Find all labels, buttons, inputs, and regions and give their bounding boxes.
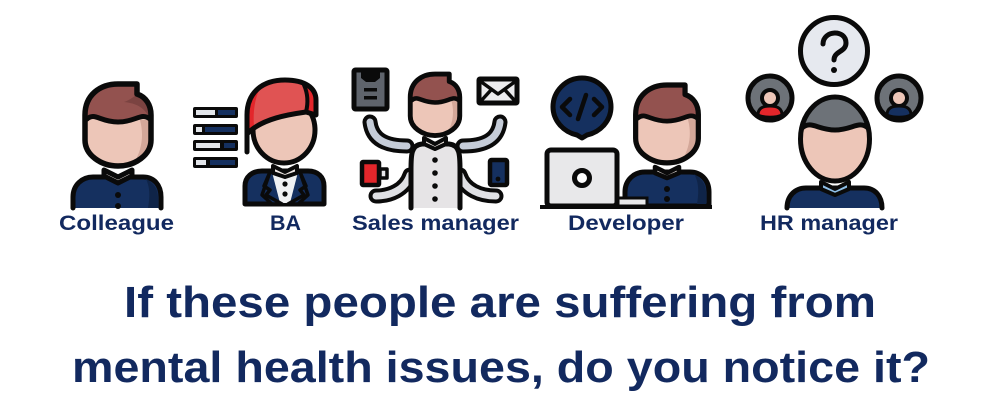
icon: code bubble [553,78,611,138]
icon: sales manager head [410,74,460,136]
figure: BA [245,80,324,204]
icon: developer body [625,167,709,206]
icon: left avatar [748,76,792,120]
figure: sales manager [354,70,517,208]
label: Colleague: Colleague [59,212,174,235]
icon: HR head [800,97,870,181]
icon: upper arms [370,122,500,146]
label: Developer: Developer [568,212,684,235]
title [72,278,930,392]
icon: question bubble [800,18,868,84]
figure: developer [540,78,712,209]
figure: colleague [73,84,161,209]
label: BA: BA [270,212,301,235]
icon: laptop [540,150,712,209]
icon: mug [362,162,387,185]
icon: colleague head [85,84,151,166]
icon: colleague body [73,170,161,209]
icon: BA head [247,80,316,163]
icon: clipboard [354,70,387,109]
label: Sales manager: Sales manager [352,212,519,235]
label: HR manager: HR manager [760,212,898,235]
icon: task list [193,107,238,168]
title: mental health issues, do you notice it? [72,343,930,392]
figure: HR manager [748,18,921,208]
icon: phone [490,160,507,185]
icon: developer head [636,85,698,163]
icon: shirt [411,138,460,208]
icon: BA suit [245,166,324,204]
icon: HR body [787,182,882,208]
title: If these people are suffering from [124,278,876,327]
icon: lower arms [376,175,496,196]
icon: envelope [479,79,517,103]
icon: right avatar [877,76,921,120]
